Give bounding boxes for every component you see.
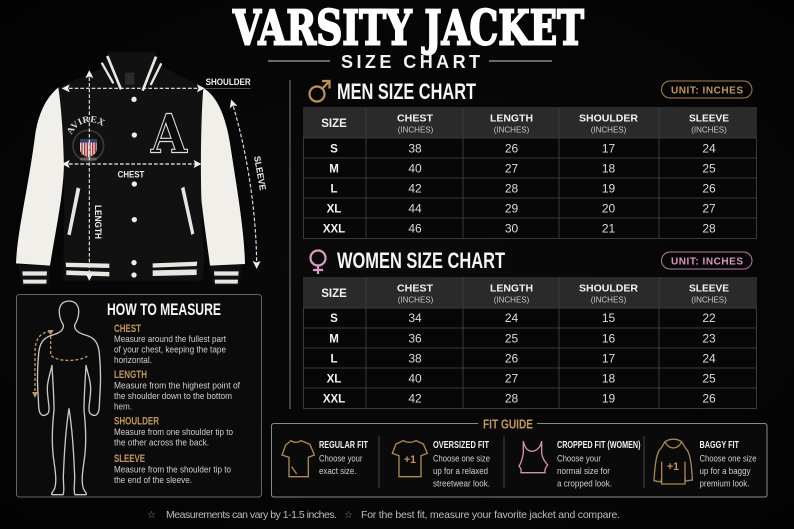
women unit badge [662,252,752,269]
table header: (INCHES) [591,296,627,304]
shoulder label: SHOULDER [206,77,251,87]
pockets [67,187,194,235]
badge [68,116,106,162]
baggy fit: Choose one size [700,454,756,464]
cropped fit: Choose your [557,454,601,464]
men heading: MEN SIZE CHART [337,79,476,104]
table rows: 25 [505,332,518,346]
table header: (INCHES) [494,126,530,134]
table rows: 40 [408,372,422,386]
table rows: 28 [505,182,518,196]
table rows: 27 [505,372,518,386]
table rows: 24 [505,311,518,325]
length instructions: hem. [114,402,132,412]
table rows [303,277,757,408]
table rows: 28 [702,222,716,236]
table rows: 42 [408,392,422,406]
jacket illustration [16,52,268,285]
table header: LENGTH [490,112,533,124]
footer note: For the best fit, measure your favorite jacket and compare. [361,509,620,521]
regular fit [282,440,368,477]
icon: crop top [519,441,548,473]
icon: female symbol [310,250,326,274]
subtitle: SIZE CHART [341,52,480,72]
letter patch: A [150,102,188,165]
table rows: 24 [702,142,716,156]
oversized fit: up for a relaxed [433,466,488,477]
table rows: M [329,164,339,176]
left cuff [18,265,51,285]
table rows: L [330,354,338,366]
table rows: 38 [408,142,422,156]
footer note [147,509,620,521]
table rows: 25 [702,372,716,386]
snaps [131,97,137,278]
right sleeve [199,88,245,266]
sleeve instructions: Measure from the shoulder tip to [114,464,231,476]
table rows: 23 [702,332,716,346]
sleeve measure arrow [232,101,257,267]
oversized fit: OVERSIZED FIT [433,440,489,451]
regular fit: exact size. [319,466,356,477]
women heading: WOMEN SIZE CHART [337,248,505,273]
table header [303,277,757,308]
table header: (INCHES) [591,126,627,134]
icon: t-shirt [282,441,314,477]
table rows [303,107,757,238]
footer note: ☆ [344,510,353,521]
table header: SHOULDER [579,112,638,124]
baggy fit: premium look. [700,478,750,490]
cropped fit: a cropped look. [557,478,612,490]
collar label [125,73,134,85]
women heading [310,248,505,274]
shoulder instructions: SHOULDER [114,416,159,428]
table rows: 24 [702,352,716,366]
table header: SLEEVE [689,112,729,124]
body silhouette [35,301,101,495]
table header: (INCHES) [691,126,727,134]
heading: HOW TO MEASURE [107,301,221,319]
panel: fit guide [272,416,767,497]
table header: SHOULDER [579,282,638,294]
table rows: 42 [408,182,422,196]
table header: LENGTH [490,282,533,294]
chest label: CHEST [118,170,145,180]
oversized fit [392,440,490,490]
table rows: 25 [702,162,716,176]
chest instructions: of your chest, keeping the tape [114,344,226,356]
chest instructions [114,323,226,366]
heading: FIT GUIDE [483,416,533,432]
table rows: XL [327,204,341,216]
table header: SIZE [321,118,347,130]
chest measure arrow [63,162,200,166]
table rows: 44 [408,202,422,216]
section divider [289,80,291,409]
table header: (INCHES) [691,296,727,304]
women unit badge: UNIT: INCHES [671,256,743,268]
table rows: 27 [505,162,518,176]
men unit badge: UNIT: INCHES [671,86,743,96]
table rows: S [330,313,338,325]
table rows: 18 [602,162,615,176]
length instructions: LENGTH [114,369,147,381]
table rows: S [330,144,338,156]
table header: (INCHES) [398,296,434,304]
table rows: 27 [702,202,716,216]
table rows: 40 [408,162,422,176]
table rows: 19 [602,182,615,196]
length label: LENGTH [93,205,103,239]
length instructions [114,369,240,412]
table header: CHEST [397,282,434,294]
table rows: 26 [702,392,716,406]
table rows: M [329,334,339,346]
jacket body [58,52,204,281]
men size table [303,107,757,238]
chest instructions: Measure around the fullest part [114,334,226,345]
title: VARSITY JACKET [232,0,584,56]
oversized fit: streetwear look. [433,478,490,490]
table rows: 26 [505,142,518,156]
men heading [310,79,476,104]
table header: SIZE [321,288,347,300]
table rows: 21 [602,222,615,236]
right cuff [211,265,242,285]
regular fit: Choose your [319,454,362,464]
footer note: ☆ [147,510,156,521]
sleeve label: SLEEVE [252,155,268,191]
sleeve instructions [114,453,231,486]
length measure arrow [88,72,91,279]
oversized fit: Choose one size [433,454,490,464]
cropped fit [519,440,640,490]
table header: (INCHES) [494,296,530,304]
table rows: 19 [602,392,615,406]
shoulder instructions: the other across the back. [114,438,209,448]
length instructions: Measure from the highest point of [114,380,240,392]
cropped fit: normal size for [557,466,610,477]
sleeve instructions: the end of the sleeve. [114,475,192,486]
table rows: 16 [602,332,615,346]
chest instructions: CHEST [114,323,141,335]
panel: how to measure [16,294,262,497]
table rows: 34 [408,311,422,325]
shoulder instructions: Measure from one shoulder tip to [114,427,233,438]
table rows: 28 [505,392,518,406]
icon: t-shirt plus one: +1 [404,454,416,466]
baggy fit: up for a baggy [700,466,751,477]
measuring guides [35,330,87,397]
collar [102,56,161,91]
table rows: 26 [702,182,716,196]
table rows: 38 [408,352,422,366]
table rows: 20 [602,202,615,216]
baggy fit: BAGGY FIT [700,440,739,451]
table rows: XXL [323,394,345,406]
table rows: L [330,184,338,196]
shoulder measure arrow [63,87,203,90]
table rows: XXL [323,224,345,236]
table rows: 29 [505,202,518,216]
length instructions: the shoulder down to the bottom [114,391,232,402]
table rows: 17 [602,142,615,156]
icon: male symbol [310,81,330,102]
regular fit: REGULAR FIT [319,440,368,451]
table rows: XL [327,374,341,386]
chest instructions: horizontal. [114,355,152,366]
table header: CHEST [397,112,434,124]
shoulder instructions [114,416,233,448]
badge: AVIREX [68,116,106,135]
table rows: 36 [408,332,422,346]
table rows: 30 [505,222,518,236]
table rows: 26 [505,352,518,366]
sleeve instructions: SLEEVE [114,453,145,465]
table rows: 18 [602,372,615,386]
table header: SLEEVE [689,282,729,294]
footer note: Measurements can vary by 1-1.5 inches. [166,509,337,521]
table header: (INCHES) [398,126,434,134]
table rows: 22 [702,311,716,325]
table rows: 46 [408,222,422,236]
table header [303,107,757,138]
table rows: 15 [602,311,615,325]
left sleeve [16,87,64,266]
baggy fit [654,439,756,490]
men unit badge [662,81,752,98]
icon: hoodie plus one: +1 [667,461,679,473]
waistband [66,262,197,276]
cropped fit: CROPPED FIT (WOMEN) [557,440,640,451]
table rows: 17 [602,352,615,366]
women size table [303,277,757,408]
